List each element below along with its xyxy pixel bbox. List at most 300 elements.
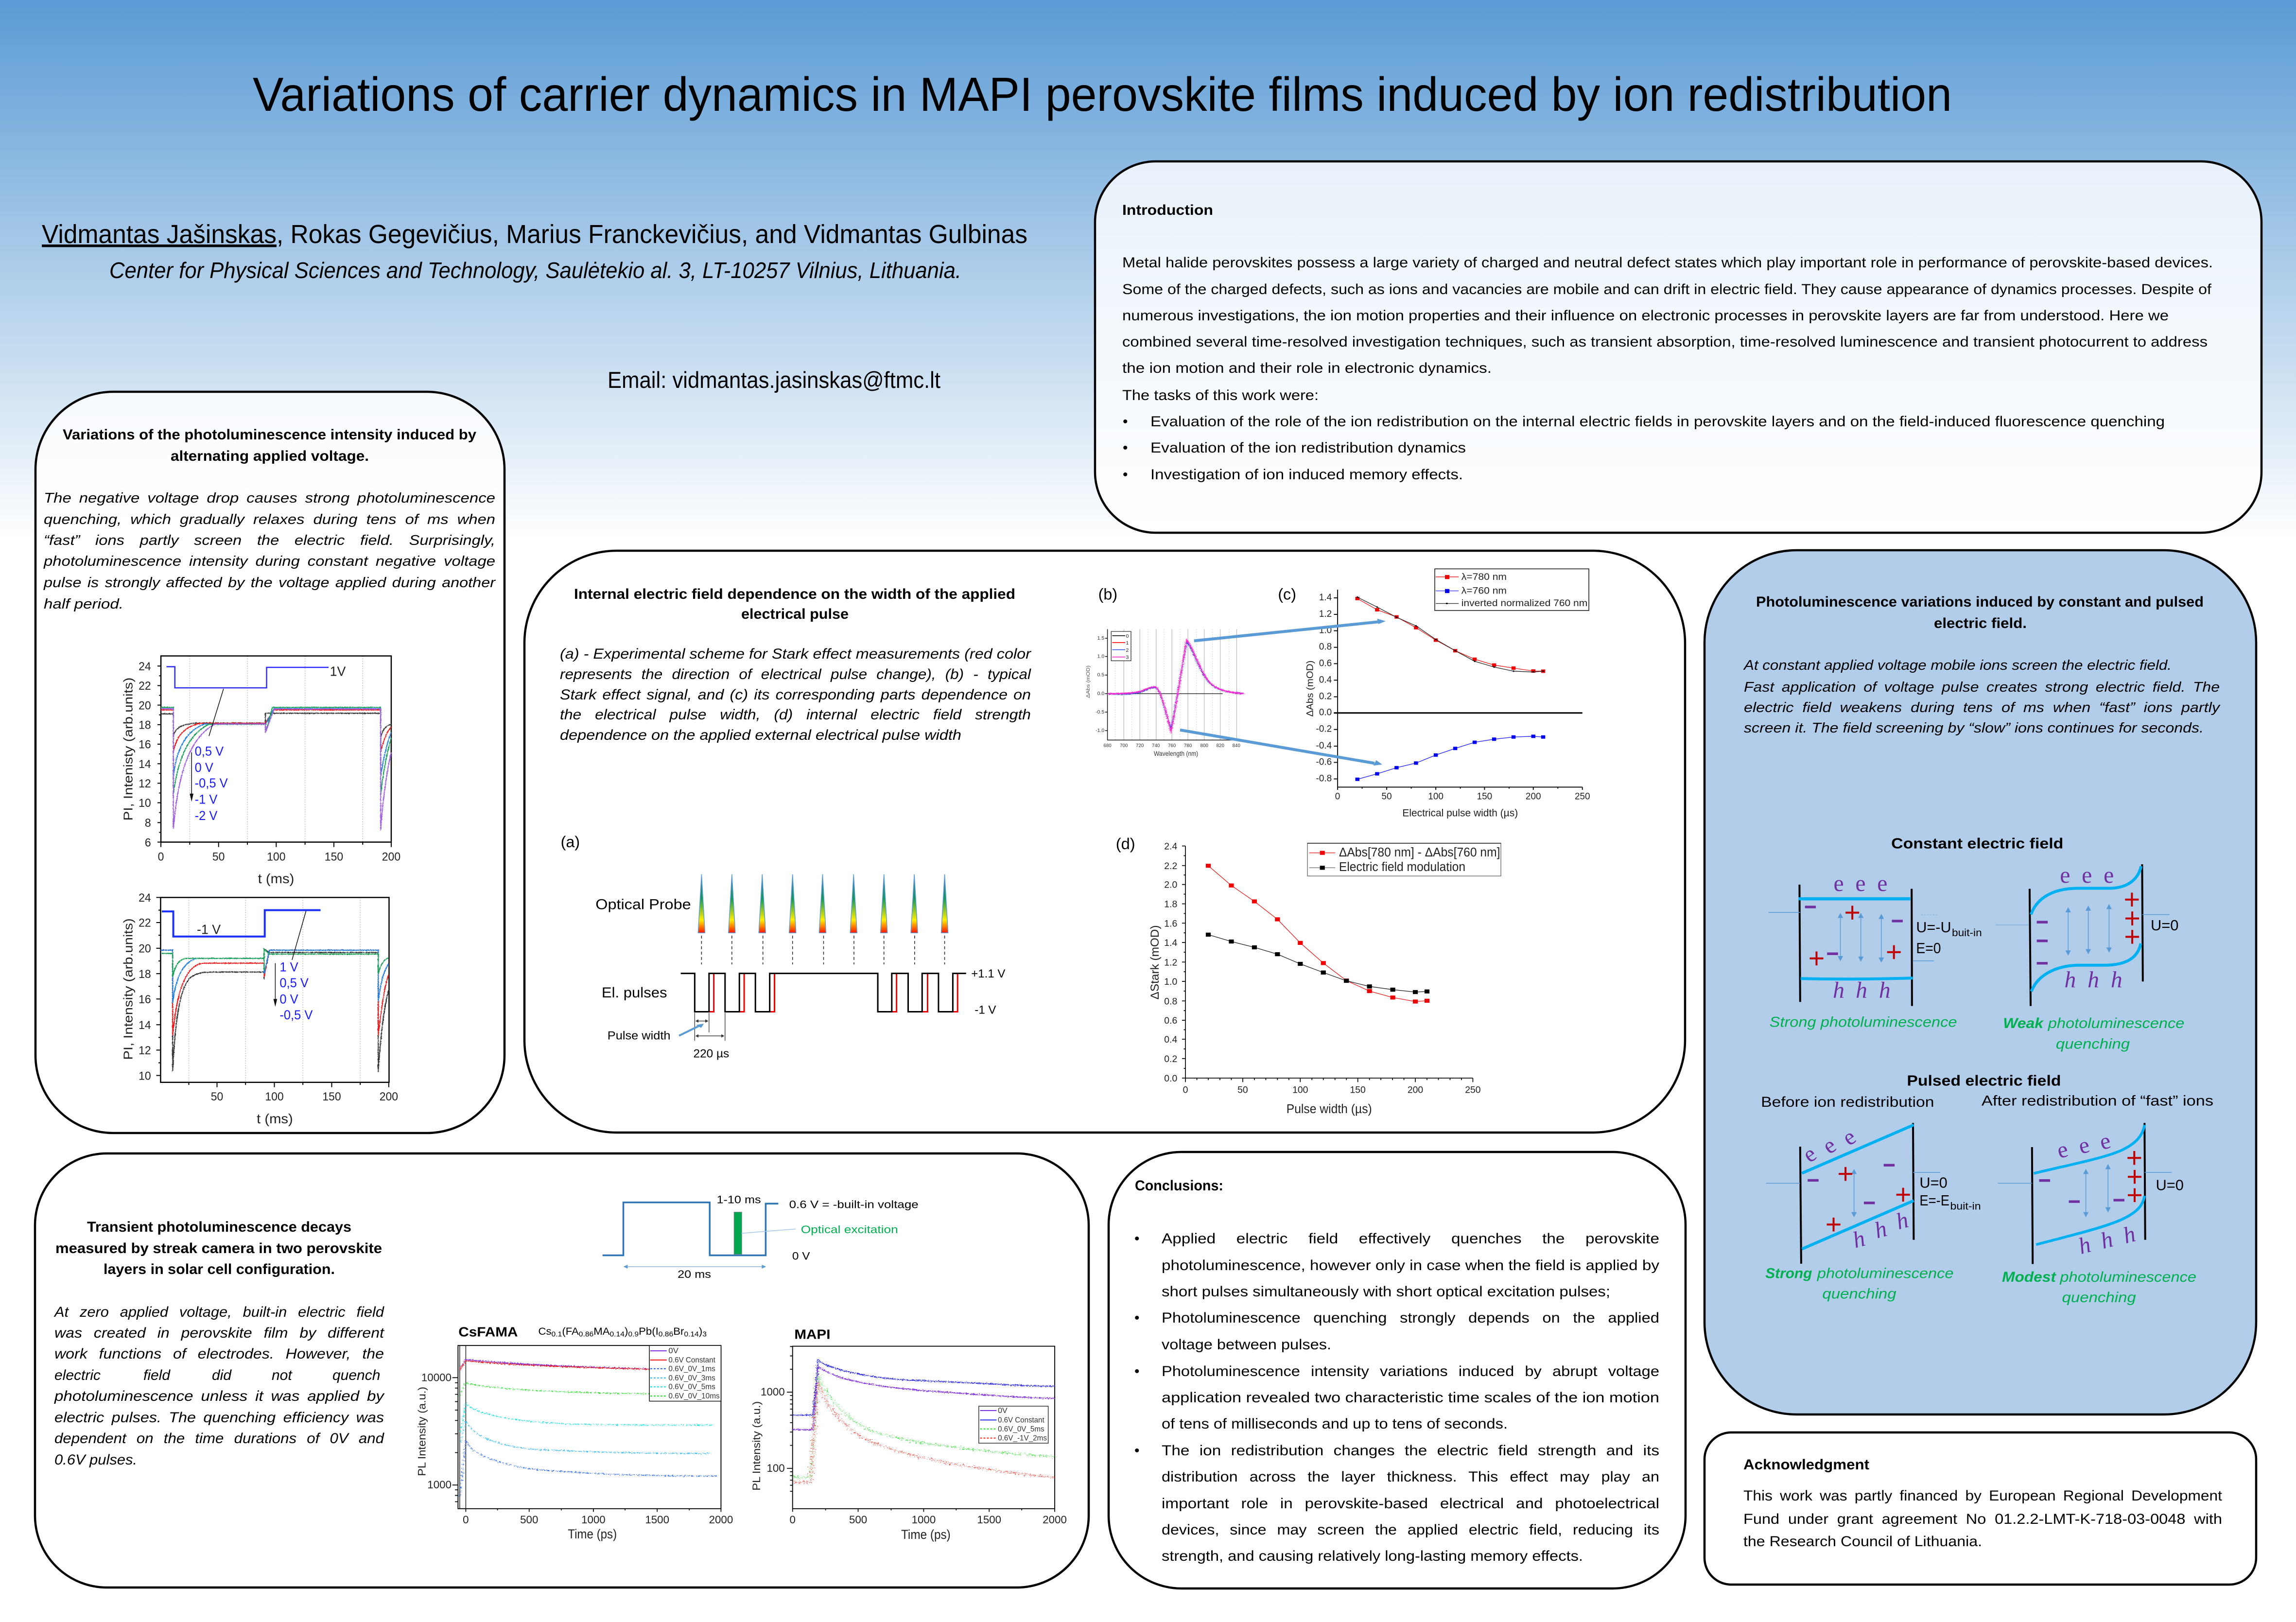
heading: pulsed electric field: Pulsed electric field (1907, 1073, 2061, 1089)
legend (649, 1345, 721, 1401)
chart: PL intensity with 1 V half period: 16 (139, 738, 151, 751)
diagram (a): experimental scheme: El. pulses (602, 985, 667, 1001)
chart: PL intensity with 1 V half period: 200 (382, 850, 400, 863)
diagram (a): experimental scheme: +1.1 V (971, 967, 1006, 980)
panel: photoluminescence intensity vs alternating voltage (35, 392, 504, 1133)
chart: CsFAMA PL decays: PL Intensity (a.u.) (416, 1387, 428, 1476)
chart: CsFAMA PL decays: Cs (539, 1326, 551, 1337)
pulse width annotation: 220 µs (694, 1047, 729, 1061)
chart (d): internal electric field vs pulse width: Pulse width (µs) (1287, 1102, 1372, 1116)
legend (1111, 631, 1131, 661)
legend: 0 (1126, 633, 1129, 639)
chart (b): Stark effect signal (1085, 585, 1245, 757)
text block: acknowledgment body (1743, 1488, 2223, 1550)
band diagram: tilted bands: e (1818, 1132, 1841, 1159)
chart: CsFAMA PL decays: ) (699, 1326, 702, 1337)
legend: 0.6V_0V_10ms (668, 1392, 720, 1400)
chart (b): Stark effect signal: 1.0 (1097, 653, 1104, 659)
text block: constant and pulsed description: Fast application of voltage pulse creates strong electric field. The (1744, 680, 2220, 695)
section: pulsed electric field (1761, 1073, 2213, 1306)
applied voltage step (167, 667, 329, 688)
caption: strong quenching (1765, 1265, 1953, 1302)
legend: λ=760 nm (1461, 586, 1507, 596)
chart: PL intensity with 1 V half period: 18 (139, 718, 151, 732)
caption: weak quenching: photoluminescence (2048, 1015, 2184, 1031)
chart: CsFAMA PL decays: Time (ps) (568, 1527, 617, 1541)
subheading: before redistribution: Before ion redistribution (1761, 1094, 1934, 1110)
diagram (a): experimental scheme: -1 V (974, 1004, 996, 1017)
heading: constant and pulsed: Photoluminescence variations induced by constant and pulsed (1756, 594, 2204, 610)
text block: alternating voltage description: quenching, which gradually relaxes during tens of ms when (44, 512, 495, 527)
section: constant electric field (1769, 836, 2184, 1052)
band diagram: flat bands: buit-in (1952, 927, 1982, 939)
text block: transient decays description: field (143, 1367, 171, 1383)
applied voltage step (162, 910, 321, 937)
affiliation: Center for Physical Sciences and Technology, Saulėtekio al. 3, LT-10257 Vilnius, Lithuania. (109, 258, 961, 283)
chart: CsFAMA PL decays: 1500 (645, 1514, 669, 1526)
chart: MAPI PL decays (750, 1326, 1067, 1542)
legend: 0.6V_0V_5ms (668, 1382, 715, 1391)
band diagram: screened field (1996, 863, 2178, 1006)
caption: weak quenching (2003, 1015, 2184, 1052)
heading: constant and pulsed (1756, 594, 2204, 631)
diagram: excitation pulse scheme: 20 ms (678, 1268, 711, 1280)
text block: transient decays description: quench (332, 1367, 380, 1383)
chart (c): signal parts vs pulse width: 1.2 (1319, 609, 1332, 619)
band diagram: screened field: e (2104, 863, 2114, 888)
chart: MAPI PL decays: 1000 (912, 1514, 936, 1526)
text block: conclusions list: voltage between pulses. (1162, 1337, 1331, 1353)
chart: CsFAMA PL decays: 1000 (427, 1479, 452, 1491)
text block: introduction body: combined several time-resolved investigation techniques, such as transient absorption, time-resolved luminescence and transient photocurrent to address (1122, 334, 2208, 350)
chart (d): internal electric field vs pulse width: 1.0 (1164, 977, 1177, 987)
panel: transient photoluminescence decays (35, 1153, 1089, 1587)
chart: PL intensity with 1 V half period: 22 (139, 680, 151, 692)
text block: figure caption: the electrical pulse width, (d) internal electric field strength (560, 707, 1031, 723)
text block: introduction body: Investigation of ion induced memory effects. (1150, 467, 1463, 483)
legend: ΔAbs[780 nm] - ΔAbs[760 nm] (1339, 846, 1500, 859)
text block: alternating voltage description: “fast” ions partly screen the electric field. Surprisingly, (44, 533, 495, 548)
chart (d): internal electric field vs pulse width: 100 (1292, 1085, 1308, 1096)
band diagram: screened field: h (2087, 968, 2099, 993)
black inverted series (1357, 596, 1544, 673)
heading: conclusions: Conclusions: (1135, 1178, 1223, 1194)
pointer and voltage legend: 0,5 V (279, 976, 309, 990)
chart (b): Stark effect signal: 740 (1152, 743, 1160, 749)
chart: CsFAMA PL decays: 2000 (709, 1514, 733, 1526)
text block: transient decays description: not (272, 1367, 293, 1383)
band diagram: tilted bands: e (1798, 1141, 1821, 1168)
blue 760 nm series (1356, 734, 1545, 781)
chart: CsFAMA PL decays: (FA (562, 1326, 579, 1337)
chart (c): signal parts vs pulse width: 200 (1526, 792, 1541, 802)
chart (c): signal parts vs pulse width: 100 (1428, 792, 1444, 802)
diagram: excitation pulse scheme: 1-10 ms (716, 1194, 761, 1206)
band diagram: tilted bands: U=0 (1919, 1174, 1948, 1191)
chart: PL intensity with 1 V half period: 0 (158, 850, 164, 863)
chart (b): Stark effect signal: -1.0 (1096, 728, 1104, 733)
chart (d): internal electric field vs pulse width: ΔStark (mOD) (1148, 925, 1162, 999)
chart: CsFAMA PL decays: 0.86 (579, 1330, 593, 1338)
chart (c): signal parts vs pulse width: 0.8 (1319, 642, 1332, 652)
chart (c): signal parts vs pulse width: 0 (1335, 792, 1340, 802)
band diagram: screened field: e (2082, 863, 2092, 888)
text block: conclusions list: strength, and causing relatively long-lasting memory effects. (1162, 1548, 1583, 1564)
chart: PL intensity with 1 V half period: 24 (139, 660, 151, 673)
text block: constant and pulsed description: At constant applied voltage mobile ions screen the electric field. (1743, 658, 2172, 673)
chart: MAPI PL decays: PL Intensity (a.u.) (750, 1401, 763, 1491)
pointer and voltage legend: 0 V (279, 992, 298, 1007)
chart: CsFAMA PL decays: 0 (463, 1514, 469, 1526)
chart (c): signal parts vs pulse width: 0.0 (1319, 708, 1332, 718)
text block: transient decays description: was created in perovskite film by different (54, 1325, 385, 1341)
chart (c): signal parts vs pulse width: 1.0 (1319, 626, 1332, 636)
chart (d): internal electric field vs pulse width: 0.6 (1164, 1015, 1177, 1026)
chart: MAPI PL decays: 100 (766, 1462, 785, 1474)
caption: strong photoluminescence: Strong photoluminescence (1770, 1014, 1957, 1030)
pointer and voltage legend: 0 V (195, 760, 213, 775)
band diagram: tilted bands: e (1837, 1124, 1861, 1151)
pointer and voltage legend: -1 V (195, 792, 218, 807)
chart (b): Stark effect signal: 760 (1168, 743, 1176, 749)
diagram (a): experimental scheme: Optical Probe (595, 897, 691, 913)
chart (d): internal electric field vs pulse width: 200 (1408, 1085, 1423, 1096)
legend: 3 (1126, 655, 1129, 661)
band diagram: partly screened bands: e (2076, 1132, 2092, 1159)
band diagram: flat bands: h (1879, 978, 1891, 1003)
text block: introduction body: • (1123, 467, 1128, 483)
decay curves (160, 949, 389, 1072)
icon: optical probe pulses (698, 874, 948, 933)
caption: strong quenching: quenching (1822, 1286, 1896, 1302)
chart (c): signal parts vs pulse width: 0.4 (1319, 675, 1332, 685)
chart: PL intensity with -1 V half period: 16 (139, 993, 151, 1006)
text block: figure caption: dependence on the applied external electrical pulse width (560, 727, 961, 743)
text block: transient decays description (53, 1304, 385, 1468)
band diagram: screened field: U=0 (2151, 917, 2178, 934)
text block: constant and pulsed description (1743, 658, 2221, 736)
band diagram: partly screened bands: h (2098, 1227, 2116, 1254)
chart: CsFAMA PL decays: 0.14 (609, 1330, 625, 1338)
chart (c): signal parts vs pulse width: -0.6 (1316, 757, 1332, 767)
decay curves (161, 707, 391, 830)
chart: PL intensity with 1 V half period: 12 (139, 777, 151, 790)
chart: PL intensity with 1 V half period: 100 (267, 850, 285, 863)
band diagram: tilted bands: h (1894, 1207, 1911, 1235)
chart (c): signal parts vs pulse width: Electrical pulse width (µs) (1402, 808, 1518, 819)
diagram: excitation pulse scheme: 0.6 V = -built-in voltage (789, 1199, 919, 1211)
chart: CsFAMA PL decays: 0.14 (684, 1330, 699, 1338)
legend: Electric field modulation (1339, 860, 1465, 874)
chart (d): internal electric field vs pulse width: 0.2 (1164, 1054, 1177, 1064)
black electric field modulation series (1206, 933, 1429, 994)
subheading: after redistribution: After redistribution of “fast” ions (1982, 1093, 2213, 1109)
text block: figure caption (560, 646, 1031, 743)
chart (d): internal electric field vs pulse width: 1.8 (1164, 899, 1177, 910)
chart (c): signal parts vs pulse width (1278, 569, 1590, 819)
text block: introduction body: numerous investigations, the ion motion properties and their influence on electronic processes in perovskite layers are far from understood. Here we (1122, 308, 2169, 324)
chart: CsFAMA PL decays: 0.9 (628, 1330, 639, 1338)
chart (d): internal electric field vs pulse width: 1.4 (1164, 938, 1177, 948)
chart: CsFAMA PL decays: 3 (702, 1330, 707, 1338)
pulse width annotation (608, 1013, 729, 1061)
chart (d): internal electric field vs pulse width: 0 (1183, 1085, 1188, 1096)
lower noisy decay curves (793, 1375, 1055, 1482)
text block: conclusions list: of tens of milliseconds and up to tens of seconds. (1162, 1416, 1508, 1432)
heading: alternating voltage: alternating applied voltage. (171, 448, 369, 464)
chart: PL intensity with -1 V half period: 50 (211, 1090, 223, 1103)
pointer and voltage legend (190, 689, 228, 823)
chart (c): signal parts vs pulse width: 0.6 (1319, 658, 1332, 668)
chart: CsFAMA PL decays: Pb(I (639, 1326, 659, 1337)
decay curves (460, 1360, 720, 1497)
text block: conclusions list: • (1134, 1231, 1140, 1247)
heading: introduction: Introduction (1122, 202, 1213, 218)
chart (d): internal electric field vs pulse width: 2.4 (1164, 841, 1177, 852)
band diagram: screened field: e (2060, 863, 2070, 888)
chart: PL intensity with -1 V half period: 18 (139, 967, 151, 980)
chart (b): Stark effect signal: ΔAbs (mOD) (1085, 665, 1091, 698)
caption: modest quenching: Modest (2002, 1269, 2056, 1285)
caption: modest quenching (2002, 1269, 2196, 1306)
chart (b): Stark effect signal: 0.5 (1097, 672, 1104, 678)
chart: MAPI PL decays: Time (ps) (901, 1527, 951, 1542)
heading: internal electric field (574, 586, 1015, 622)
text block: conclusions list (1134, 1231, 1659, 1564)
diagram: excitation pulse scheme: Optical excitation (801, 1223, 898, 1236)
chart: PL intensity with -1 V half period: t (ms) (257, 1111, 293, 1126)
chart: PL intensity with 1 V half period: 14 (139, 757, 151, 770)
chart: PL intensity with -1 V half period: 100 (265, 1090, 284, 1103)
text block: acknowledgment body: the Research Council of Lithuania. (1743, 1534, 1982, 1550)
chart: PL intensity with 1 V half period: 10 (139, 797, 151, 809)
chart (d): internal electric field vs pulse width: 0.4 (1164, 1034, 1177, 1045)
pointer and voltage legend: 0,5 V (195, 744, 224, 759)
diagram: excitation pulse scheme: 0 V (792, 1250, 810, 1262)
band diagram: partly screened bands: U=0 (2156, 1177, 2184, 1194)
heading: acknowledgment: Acknowledgment (1743, 1457, 1869, 1473)
legend: 0V (668, 1346, 678, 1355)
text block: introduction body: The tasks of this work were: (1122, 387, 1319, 403)
panel: constant and pulsed field variations (1705, 550, 2256, 1414)
pointer and voltage legend: -0,5 V (195, 775, 228, 790)
Stark signal curves (1108, 640, 1244, 732)
legend: 1 (1126, 640, 1129, 646)
text block: conclusions list: Photoluminescence quenching strongly depends on the applied (1162, 1310, 1659, 1326)
chart: PL intensity with 1 V half period: 1V (330, 663, 346, 679)
heading: transient decays: Transient photoluminescence decays (87, 1219, 351, 1235)
chart: CsFAMA PL decays: 1000 (581, 1514, 606, 1526)
caption: strong quenching: Strong (1765, 1265, 1812, 1281)
caption: strong quenching: photoluminescence (1817, 1265, 1953, 1281)
caption: weak quenching: Weak (2003, 1015, 2044, 1031)
band diagram: screened field: h (2064, 968, 2076, 993)
legend: 0.6V_0V_1ms (668, 1364, 715, 1373)
chart: PL intensity with -1 V half period (121, 891, 398, 1126)
legend: 0.6V_0V_3ms (668, 1374, 715, 1382)
chart (b): Stark effect signal: 800 (1200, 743, 1209, 749)
band diagram: partly screened bands (1998, 1123, 2184, 1264)
text block: introduction body (1122, 255, 2213, 483)
chart: CsFAMA PL decays: 0.86 (659, 1330, 673, 1338)
chart (d): internal electric field vs pulse width (1116, 835, 1501, 1116)
chart: PL intensity with 1 V half period: PI, Intenisty (arb.units) (121, 678, 135, 820)
text block: conclusions list: • (1134, 1310, 1140, 1326)
text block: transient decays description: electric (54, 1367, 101, 1383)
chart: MAPI PL decays: 500 (849, 1514, 867, 1526)
electrical pulse train (681, 974, 966, 1012)
heading: constant electric field: Constant electric field (1891, 836, 2063, 852)
chart: PL intensity with -1 V half period: 12 (139, 1044, 151, 1057)
band diagram: partly screened bands: e (2054, 1136, 2071, 1164)
diagram (a): experimental scheme (561, 833, 1006, 1061)
chart (d): internal electric field vs pulse width: 50 (1237, 1085, 1248, 1096)
legend: 0V (998, 1406, 1008, 1415)
text block: conclusions list: • (1134, 1443, 1140, 1459)
chart: CsFAMA PL decays: MA (593, 1326, 610, 1337)
caption: weak quenching: quenching (2056, 1036, 2130, 1052)
title: Variations of carrier dynamics in MAPI perovskite films induced by ion redistribution (253, 68, 1952, 121)
caption: modest quenching: quenching (2062, 1290, 2136, 1306)
text block: transient decays description: dependent on the time durations of 0V and (54, 1430, 384, 1447)
chart (b): Stark effect signal: 840 (1233, 743, 1240, 749)
text block: transient decays description: work functions of electrodes. However, the (54, 1346, 384, 1362)
chart (d): internal electric field vs pulse width: 1.2 (1164, 957, 1177, 968)
chart (c): signal parts vs pulse width: -0.2 (1316, 724, 1332, 734)
text block: figure caption: (a) - Experimental scheme for Stark effect measurements (red color (560, 646, 1031, 662)
chart: CsFAMA PL decays: CsFAMA (458, 1324, 518, 1339)
diagram (a): experimental scheme: (a) (561, 833, 580, 851)
text block: transient decays description: did (212, 1367, 232, 1383)
chart (b): Stark effect signal: 1.5 (1097, 635, 1104, 641)
band diagram: tilted bands: h (1872, 1216, 1890, 1243)
chart: PL intensity with -1 V half period: 22 (139, 916, 151, 929)
text block: alternating voltage description: photoluminescence intensity during constant negative voltage (43, 554, 495, 569)
text block: transient decays description: electric pulses. The quenching efficiency was (54, 1410, 384, 1426)
text block: alternating voltage description: half period. (44, 596, 123, 612)
chart (d): internal electric field vs pulse width: 2.2 (1164, 861, 1177, 872)
chart: PL intensity with 1 V half period: 20 (139, 699, 151, 712)
chart (d): internal electric field vs pulse width: 0.8 (1164, 996, 1177, 1007)
arrow: dip to 760 nm series (1180, 730, 1382, 766)
text block: alternating voltage description: The negative voltage drop causes strong photoluminescence (44, 490, 495, 506)
text block: constant and pulsed description: electric field weakens during tens of ms when “fast” ions partly (1744, 700, 2221, 715)
chart: MAPI PL decays: 2000 (1043, 1514, 1067, 1526)
chart (d): internal electric field vs pulse width: 0.0 (1164, 1073, 1177, 1084)
chart: CsFAMA PL decays: 0.1 (552, 1330, 562, 1338)
legend (979, 1406, 1048, 1443)
heading: transient decays: layers in solar cell configuration. (104, 1261, 335, 1277)
chart (c): signal parts vs pulse width: (c) (1278, 585, 1296, 603)
heading: constant and pulsed: electric field. (1934, 615, 2027, 631)
heading: transient decays (55, 1219, 382, 1277)
text block: conclusions list: application revealed two characteristic time scales of the ion motion (1162, 1390, 1659, 1406)
legend: 0.6V Constant (668, 1356, 715, 1364)
chart (b): Stark effect signal: 720 (1136, 743, 1144, 749)
legend: 2 (1126, 647, 1129, 653)
chart: CsFAMA PL decays: Br (673, 1326, 684, 1337)
chart (b): Stark effect signal: -0.5 (1096, 709, 1104, 715)
chart (b): Stark effect signal: (b) (1098, 585, 1117, 603)
chart: CsFAMA PL decays (416, 1324, 733, 1541)
chart (c): signal parts vs pulse width: 250 (1575, 792, 1590, 802)
chart (c): signal parts vs pulse width: ΔAbs (mOD) (1305, 661, 1316, 716)
text block: alternating voltage description (43, 490, 496, 612)
pointer and voltage legend: 1 V (279, 959, 298, 975)
panel: acknowledgment (1705, 1432, 2256, 1585)
chart (b): Stark effect signal: 820 (1217, 743, 1224, 749)
text block: introduction body: Evaluation of the ion redistribution dynamics (1150, 440, 1466, 456)
text block: alternating voltage description: pulse is strongly affected by the voltage applied during another (43, 575, 496, 591)
red delta-abs series (1206, 864, 1429, 1004)
chart: PL intensity with 1 V half period: t (ms) (258, 871, 294, 886)
panel: introduction (1095, 161, 2261, 533)
legend: λ=780 nm (1461, 572, 1507, 582)
legend (1435, 569, 1589, 610)
chart (c): signal parts vs pulse width: 0.2 (1319, 691, 1332, 701)
caption: modest quenching: photoluminescence (2059, 1269, 2196, 1285)
text block: conclusions list: The ion redistribution changes the electric field strength and its (1162, 1443, 1659, 1459)
band diagram: flat bands: U=-U (1916, 919, 1951, 936)
text block: introduction body: • (1123, 414, 1128, 430)
band diagram: partly screened bands: e (2097, 1128, 2113, 1155)
text block: conclusions list: Applied electric field effectively quenches the perovskite (1162, 1231, 1659, 1247)
text block: introduction body: the ion motion and their role in electronic dynamics. (1122, 360, 1492, 376)
chart: PL intensity with 1 V half period: 50 (212, 850, 225, 863)
band diagram: flat bands (1769, 871, 1982, 1006)
pointer and voltage legend (274, 911, 313, 1022)
legend: 0.6V_-1V_2ms (998, 1434, 1047, 1443)
pointer and voltage legend: -0,5 V (279, 1007, 313, 1022)
band diagram: flat bands: h (1833, 978, 1844, 1003)
pointer and voltage legend: -2 V (195, 808, 218, 823)
chart: MAPI PL decays: 1000 (761, 1386, 785, 1398)
text block: constant and pulsed description: screen it. The field screening by “slow” ions continues for seconds. (1744, 720, 2204, 736)
text block: conclusions list: photoluminescence, however only in case when the field is applied by (1162, 1257, 1659, 1273)
text block: introduction body: Metal halide perovskites possess a large variety of charged and neutral defect states which play important role in performance of perovskite-based devices. (1122, 255, 2213, 271)
diagram: excitation pulse scheme (603, 1194, 919, 1280)
band diagram: tilted bands: E=-E (1919, 1192, 1949, 1209)
chart (c): signal parts vs pulse width: -0.4 (1316, 741, 1332, 751)
band diagram: flat bands: e (1855, 871, 1866, 896)
text block: transient decays description: photoluminescence unless it was applied by (54, 1388, 385, 1404)
red 780 nm series (1356, 597, 1545, 673)
text block: conclusions list: short pulses simultaneously with short optical excitation pulses; (1162, 1284, 1610, 1300)
chart: PL intensity with 1 V half period: 150 (325, 850, 343, 863)
text block: figure caption: represents the direction of electrical pulse change), (b) - typical (560, 666, 1031, 682)
band diagram: flat bands: E=0 (1916, 940, 1941, 957)
band diagram: flat bands: e (1877, 871, 1887, 896)
chart: PL intensity with -1 V half period: -1 V (197, 922, 221, 937)
text block: conclusions list: distribution across the layer thickness. This effect may play an (1162, 1469, 1659, 1485)
text block: introduction body: Some of the charged defects, such as ions and vacancies are mobile and can drift in electric field. They cause appearance of dynamics processes. Despite of (1122, 281, 2212, 297)
chart (c): signal parts vs pulse width: 150 (1477, 792, 1492, 802)
upper decay curves (793, 1360, 1055, 1430)
panel: conclusions (1109, 1152, 1686, 1588)
text block: conclusions list: devices, since may screen the applied electric field, reducing its (1162, 1522, 1659, 1538)
chart (b): Stark effect signal: 700 (1120, 743, 1128, 749)
chart: PL intensity with -1 V half period: 14 (139, 1018, 151, 1031)
text block: conclusions list: Photoluminescence intensity variations induced by abrupt voltage (1162, 1363, 1659, 1379)
panel: internal electric field dependence (524, 551, 1685, 1133)
legend: inverted normalized 760 nm (1461, 598, 1587, 609)
band diagram: flat bands: h (1856, 978, 1867, 1003)
chart: PL intensity with -1 V half period: 24 (139, 891, 151, 904)
band diagram: tilted bands: buit-in (1950, 1201, 1981, 1212)
chart (d): internal electric field vs pulse width: 2.0 (1164, 880, 1177, 890)
chart: CsFAMA PL decays: 500 (520, 1514, 538, 1526)
chart: PL intensity with 1 V half period: 6 (145, 836, 151, 849)
